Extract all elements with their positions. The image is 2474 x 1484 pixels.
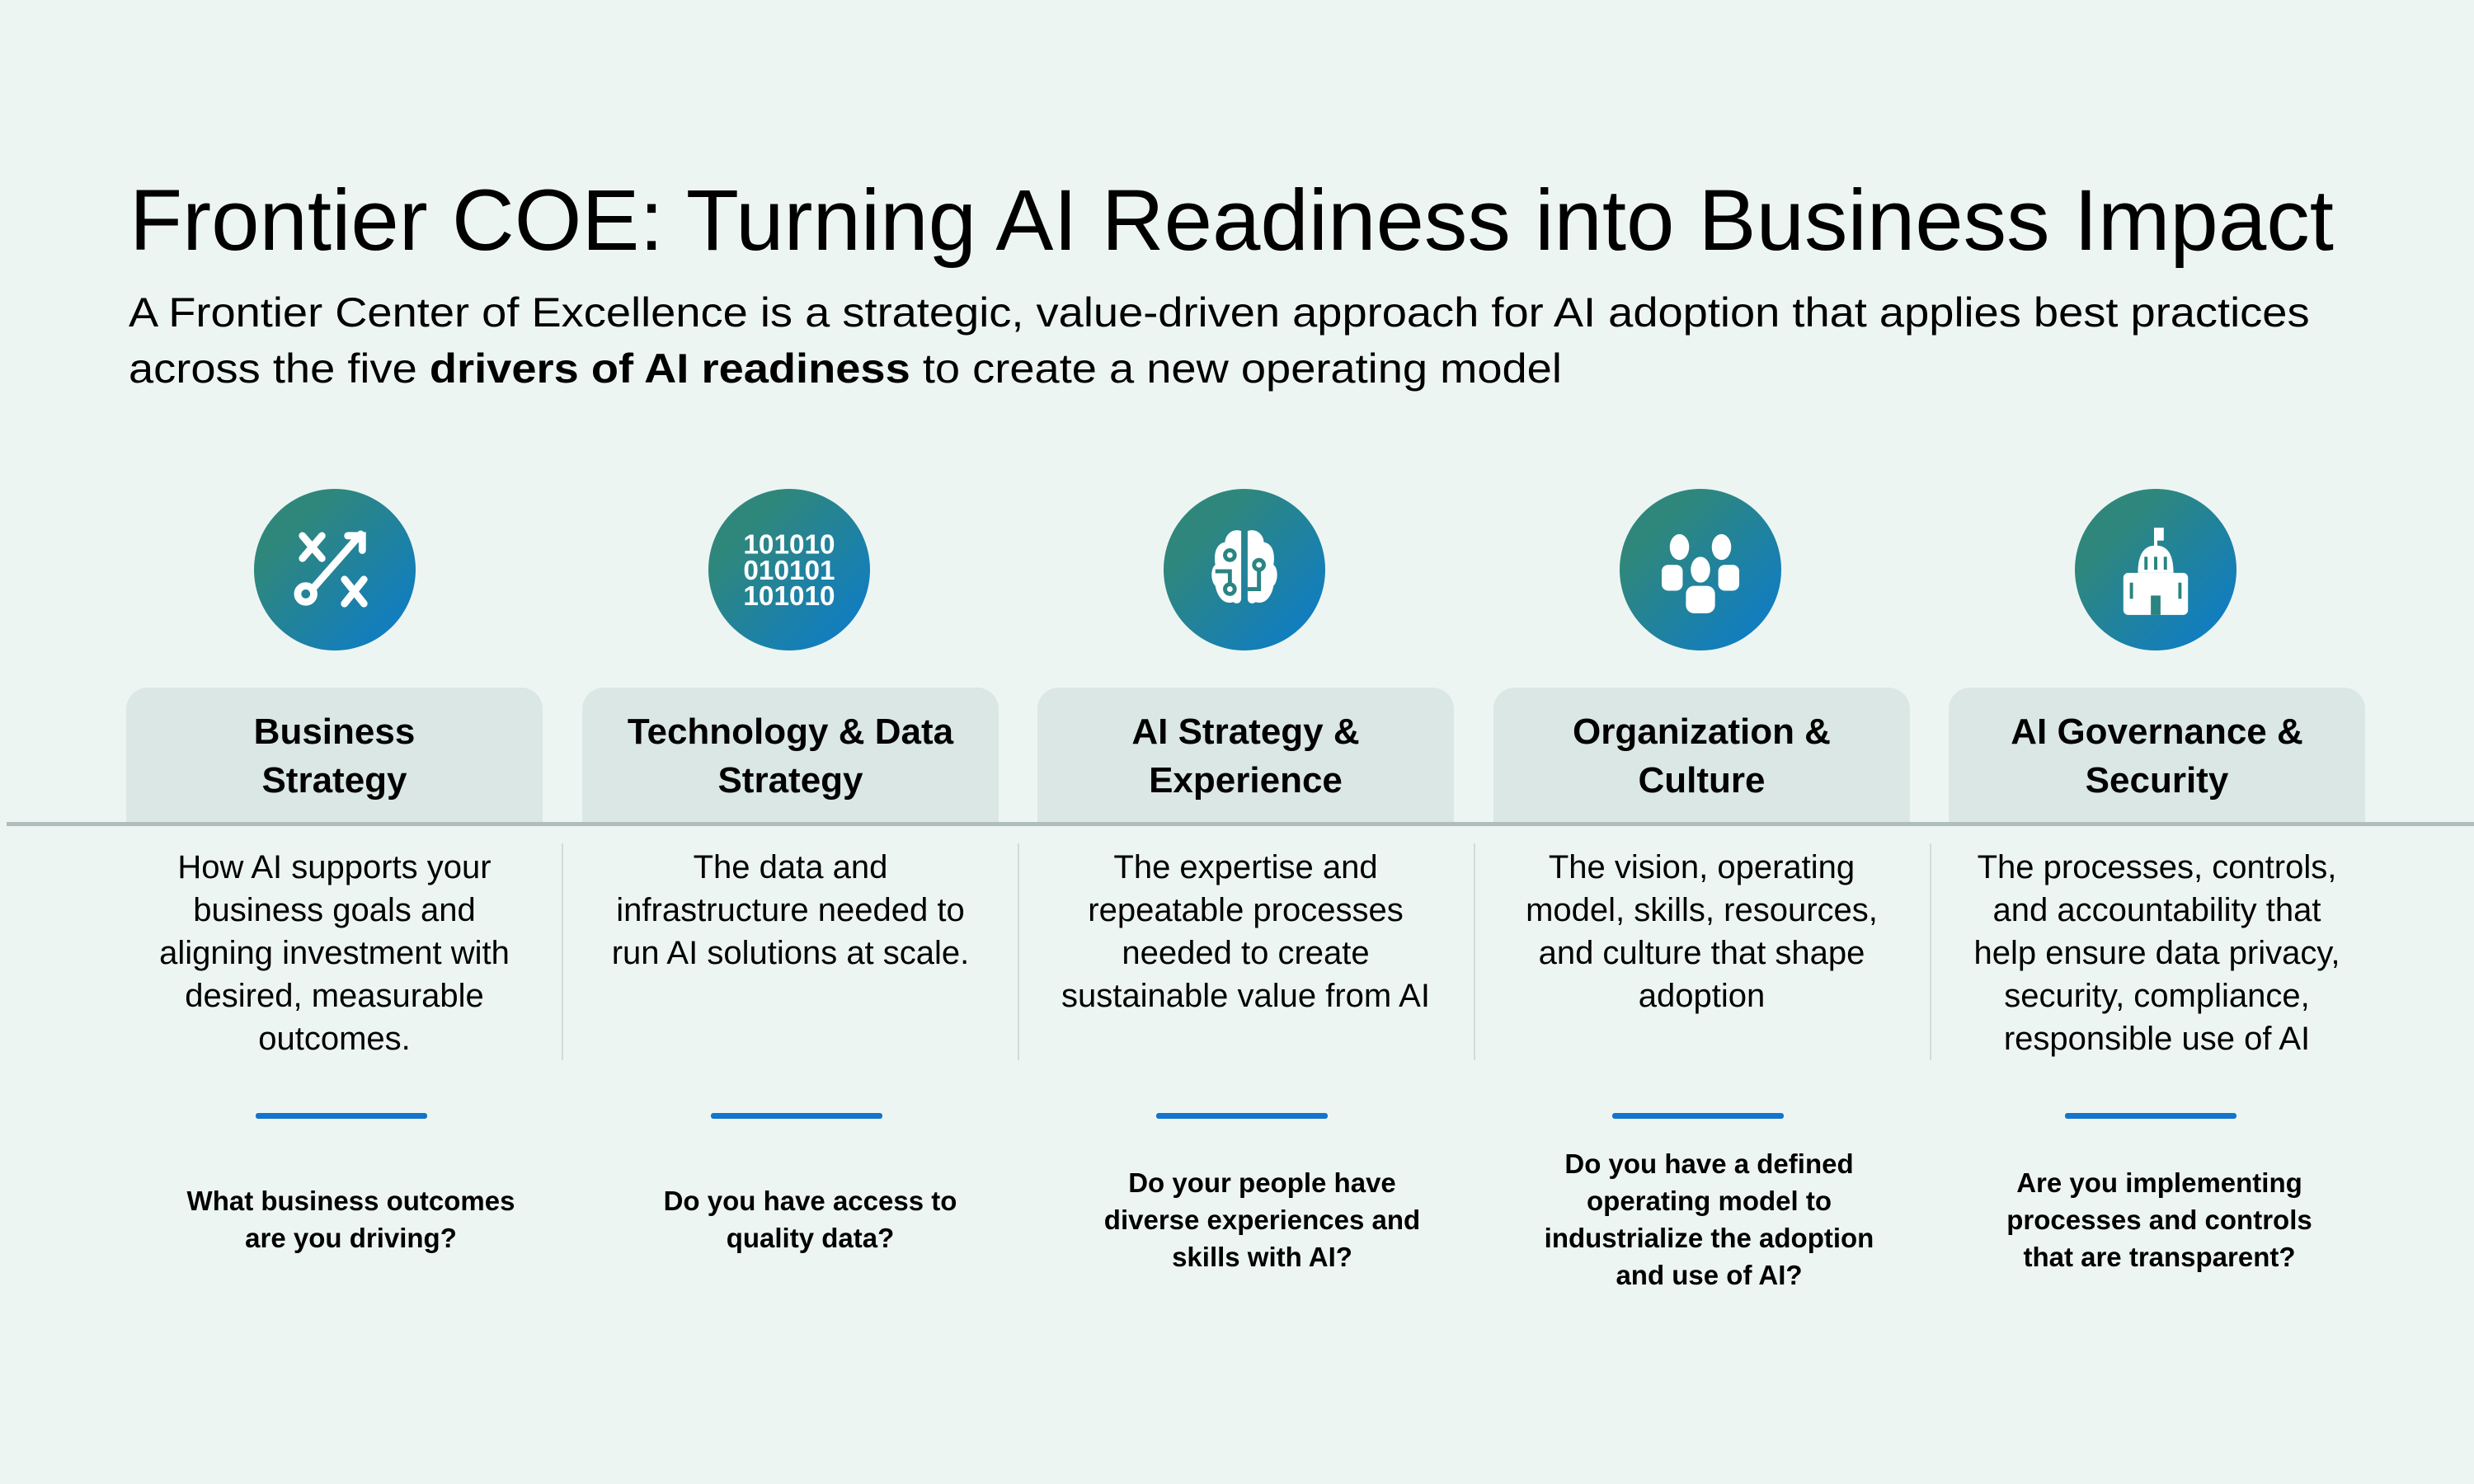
text: AI strategy description	[1061, 849, 1430, 1014]
question: data: quality data?	[727, 1223, 894, 1253]
text: technology description: infrastructure needed to	[616, 892, 965, 928]
subtitle: A Frontier Center of Excellence is a strategic, value-driven approach for AI adoption that applies best practices	[129, 289, 2310, 336]
question: data	[664, 1186, 957, 1253]
panel header: Business Strategy: Business	[254, 711, 415, 752]
panel header: Technology & Data Strategy: Strategy	[717, 760, 863, 801]
icon: binary data: 101010	[743, 529, 835, 560]
question: operating model: Do you have a defined	[1564, 1148, 1854, 1179]
text: governance description: security, compliance,	[2004, 978, 2310, 1014]
subtitle	[129, 289, 2310, 392]
text: governance description	[1974, 849, 2340, 1057]
question: business	[186, 1186, 515, 1253]
panel header: Organization & Culture	[1493, 688, 1910, 824]
question: people: diverse experiences and	[1104, 1204, 1420, 1235]
panel header: AI Governance & Security: Security	[2086, 760, 2228, 801]
question: governance	[2006, 1167, 2312, 1272]
text: business strategy description: outcomes.	[258, 1021, 411, 1057]
question: people	[1104, 1167, 1420, 1271]
question: operating model: and use of AI?	[1616, 1260, 1803, 1290]
panel header: Technology & Data Strategy: Technology & Data	[628, 711, 953, 752]
panel header: AI Governance & Security: AI Governance &	[2011, 711, 2303, 752]
text: organization description: and culture that shape	[1539, 935, 1865, 971]
panel header: Organization & Culture: Culture	[1638, 760, 1765, 801]
text: organization description: The vision, operating	[1549, 849, 1855, 885]
icon: capitol building	[2075, 489, 2236, 650]
text: organization description: model, skills, resources,	[1526, 892, 1878, 928]
text: organization description: adoption	[1639, 978, 1765, 1014]
title: Frontier COE: Turning AI Readiness into Business Impact	[129, 172, 2334, 269]
question: people: Do your people have	[1128, 1167, 1396, 1197]
text: business strategy description: business goals and	[193, 892, 476, 928]
panel header: AI Strategy & Experience: AI Strategy &	[1131, 711, 1360, 752]
panel header: Business Strategy	[126, 688, 543, 824]
question: data: Do you have access to	[664, 1186, 957, 1216]
text: AI strategy description: sustainable value from AI	[1061, 978, 1430, 1014]
text: organization description	[1526, 849, 1878, 1014]
panel header: AI Strategy & Experience	[1037, 688, 1454, 824]
question: business: are you driving?	[245, 1223, 457, 1253]
panel header: Organization & Culture: Organization &	[1573, 711, 1831, 752]
panel header: Business Strategy: Strategy	[261, 760, 407, 801]
icon: binary data: 101010	[743, 581, 835, 612]
text: governance description: and accountability that	[1992, 892, 2321, 928]
text: AI strategy description: repeatable processes	[1088, 892, 1404, 928]
icon: strategy play	[254, 489, 416, 650]
panel header: Technology & Data Strategy	[582, 688, 999, 824]
text: technology description: run AI solutions at scale.	[612, 935, 969, 971]
text: governance description: The processes, controls,	[1978, 849, 2336, 885]
text: business strategy description: desired, measurable	[185, 978, 484, 1014]
icon: brain	[1164, 489, 1325, 650]
text: business strategy description	[159, 849, 510, 1057]
question: governance: that are transparent?	[2023, 1242, 2296, 1271]
text: technology description	[612, 849, 969, 971]
text: governance description: help ensure data privacy,	[1974, 935, 2340, 971]
text: technology description: The data and	[694, 849, 887, 885]
question: operating model: operating model to	[1587, 1186, 1832, 1216]
icon: binary data	[708, 489, 870, 650]
question: business: What business outcomes	[187, 1186, 515, 1216]
text: governance description: responsible use of AI	[2004, 1021, 2310, 1057]
question: operating model: industrialize the adoption	[1545, 1223, 1874, 1253]
subtitle: across the five drivers of AI readiness to create a new operating model	[129, 345, 1562, 392]
question: operating model	[1545, 1148, 1874, 1290]
text: AI strategy description: The expertise and	[1113, 849, 1378, 885]
question: governance: processes and controls	[2006, 1204, 2312, 1235]
icon: people	[1620, 489, 1781, 650]
panel header: AI Governance & Security	[1949, 688, 2365, 824]
text: business strategy description: How AI supports your	[177, 849, 492, 885]
question: people: skills with AI?	[1172, 1242, 1352, 1271]
icon: binary data: 010101	[743, 556, 835, 586]
text: business strategy description: aligning investment with	[159, 935, 510, 971]
question: governance: Are you implementing	[2016, 1167, 2302, 1197]
panel header: AI Strategy & Experience: Experience	[1149, 760, 1343, 801]
text: AI strategy description: needed to create	[1122, 935, 1370, 971]
